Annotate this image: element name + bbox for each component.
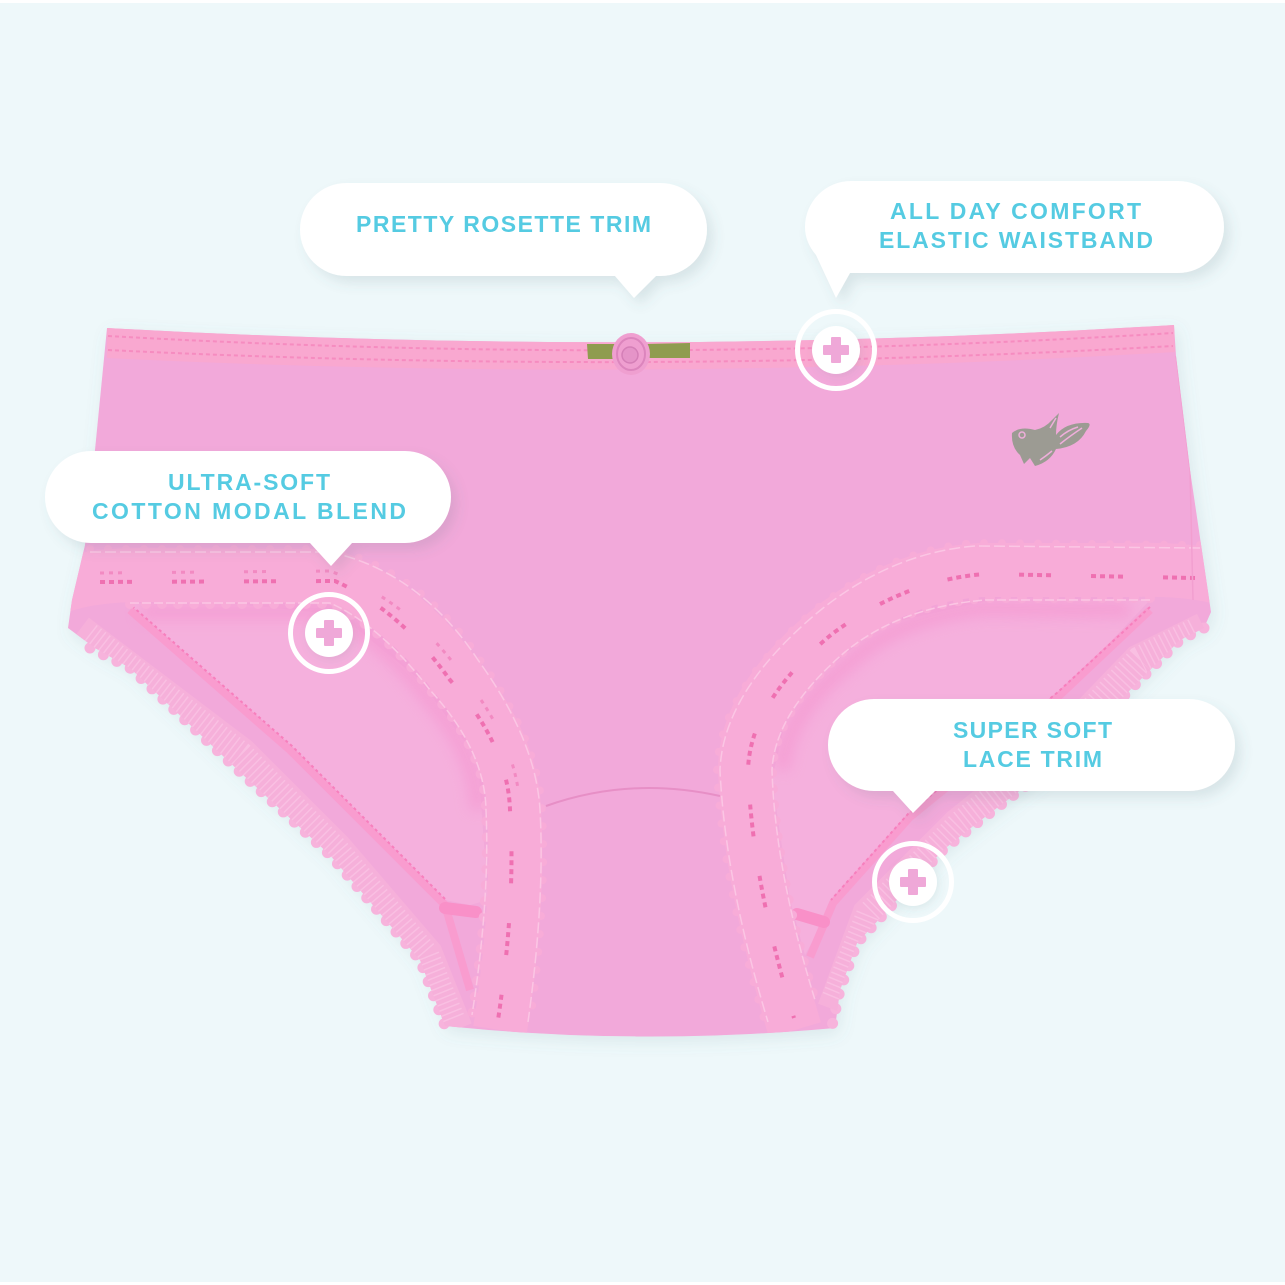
callout: super soft lace trim: SUPER SOFT [953, 717, 1112, 743]
callout: pretty rosette trim: PRETTY ROSETTE TRIM [356, 211, 651, 237]
callout: ultra-soft cotton modal blend: ULTRA-SOFT [168, 469, 330, 495]
fish logo [1012, 413, 1090, 466]
garment: pink briefs [50, 325, 1230, 1037]
garment body [68, 325, 1211, 1037]
left leg binding [78, 606, 476, 1030]
waistband [107, 325, 1175, 370]
right lace trim [717, 543, 1230, 1030]
clipped garment details [50, 356, 1230, 1030]
callout: ultra-soft cotton modal blend: COTTON MODAL BLEND [92, 498, 406, 524]
side seam [1176, 356, 1193, 600]
marker: fabric plus [290, 594, 368, 672]
right inner panel [772, 598, 1150, 955]
callout: pretty rosette trim [300, 183, 707, 298]
inner panel lace shadows [140, 608, 1130, 810]
callout: super soft lace trim [828, 699, 1235, 813]
outer scalloped edge [90, 628, 1204, 1026]
callout: ultra-soft cotton modal blend [45, 451, 451, 566]
gusset seam [546, 788, 720, 806]
callout: all day comfort elastic waistband: ELASTIC WAISTBAND [879, 227, 1153, 253]
callout: all day comfort elastic waistband: ALL DAY COMFORT [890, 198, 1141, 224]
marker: waistband plus [798, 312, 874, 388]
callout: all day comfort elastic waistband [805, 181, 1224, 298]
left lace trim [50, 549, 543, 1030]
callout: super soft lace trim: LACE TRIM [963, 746, 1102, 772]
rosette with green bow [587, 333, 690, 375]
right leg binding [797, 607, 1205, 1010]
marker: lace plus [874, 844, 952, 920]
left inner panel [125, 600, 488, 905]
